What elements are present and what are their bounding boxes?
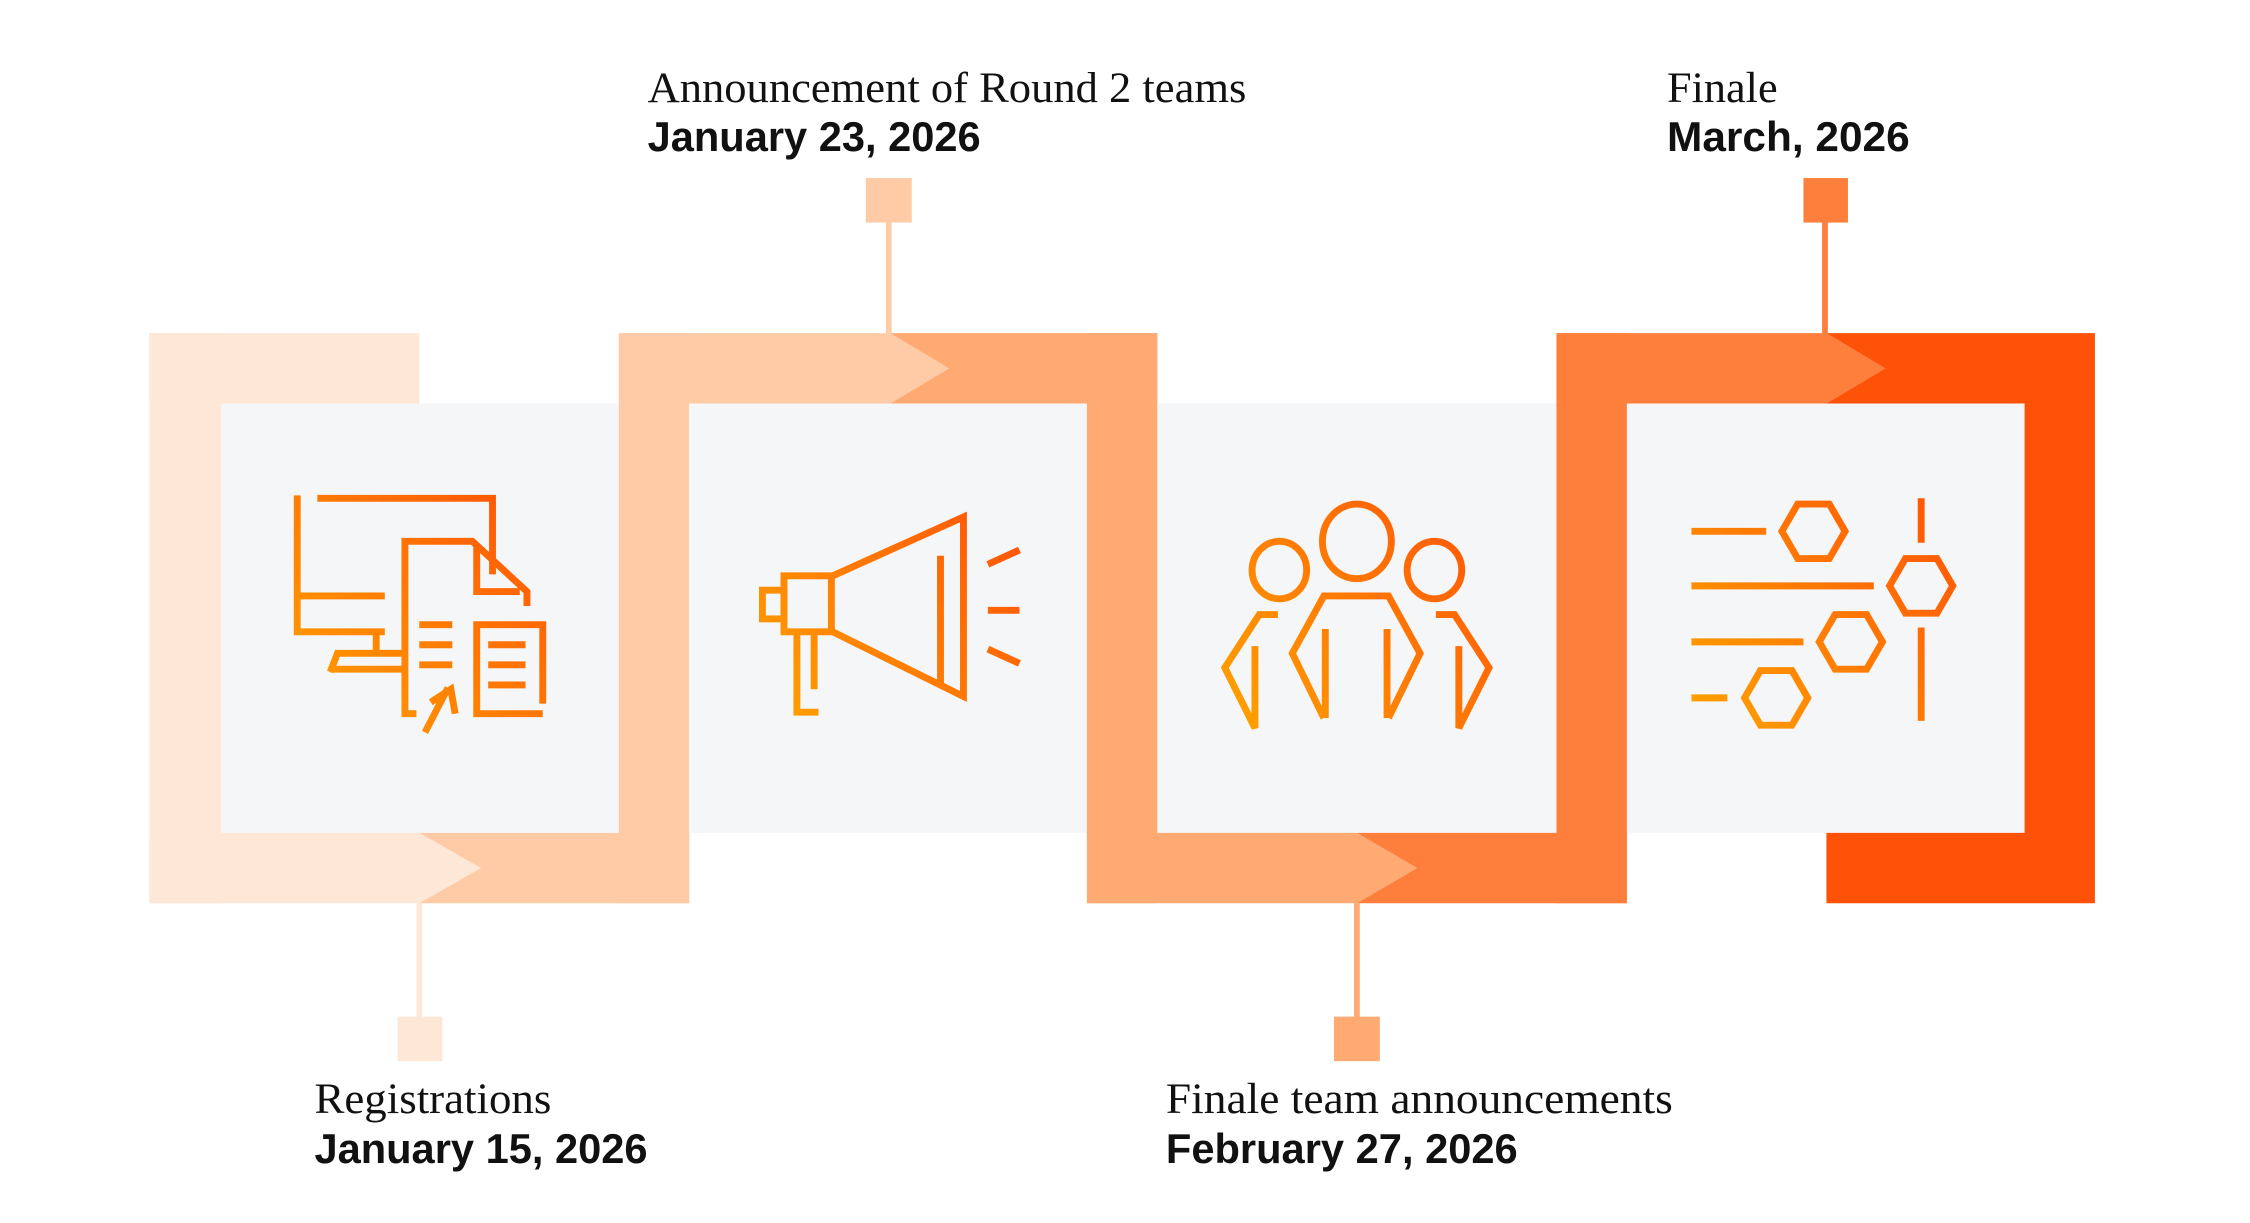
panel: step 3 box bbox=[1157, 404, 1556, 833]
band 3 bbox=[890, 333, 1417, 903]
connector: round 2 bbox=[866, 178, 912, 333]
text: registrations: January 15, 2026 bbox=[314, 1125, 648, 1172]
text: finale: March, 2026 bbox=[1667, 113, 1910, 160]
text: round 2 bbox=[648, 65, 1246, 160]
text: round 2: Announcement of Round 2 teams bbox=[648, 65, 1246, 112]
connector: registrations bbox=[398, 903, 442, 1061]
icon: registration documents bbox=[297, 495, 543, 732]
panel: step 4 box bbox=[1627, 404, 2025, 833]
band 2 bbox=[419, 333, 949, 903]
connector: finale bbox=[1803, 178, 1848, 333]
text: registrations: Registrations bbox=[314, 1076, 551, 1123]
band 4 bbox=[1357, 333, 1885, 903]
text: finale team announcements bbox=[1166, 1076, 1673, 1172]
panel: step 1 box bbox=[221, 404, 619, 833]
icon: megaphone bbox=[762, 517, 1019, 712]
text: round 2: January 23, 2026 bbox=[648, 113, 981, 160]
icon: team bbox=[1225, 504, 1489, 728]
connector: finale teams bbox=[1334, 903, 1380, 1061]
band 1 bbox=[149, 333, 481, 903]
text: registrations bbox=[314, 1076, 648, 1172]
text: finale bbox=[1667, 65, 1910, 160]
text: finale team announcements: Finale team announcements bbox=[1166, 1076, 1673, 1123]
text: finale team announcements: February 27, 2026 bbox=[1166, 1125, 1518, 1172]
panel: step 2 box bbox=[691, 404, 1087, 833]
icon: sliders with hexagons bbox=[1691, 498, 1953, 725]
text: finale: Finale bbox=[1667, 65, 1778, 112]
band 5 bbox=[1826, 333, 2095, 903]
